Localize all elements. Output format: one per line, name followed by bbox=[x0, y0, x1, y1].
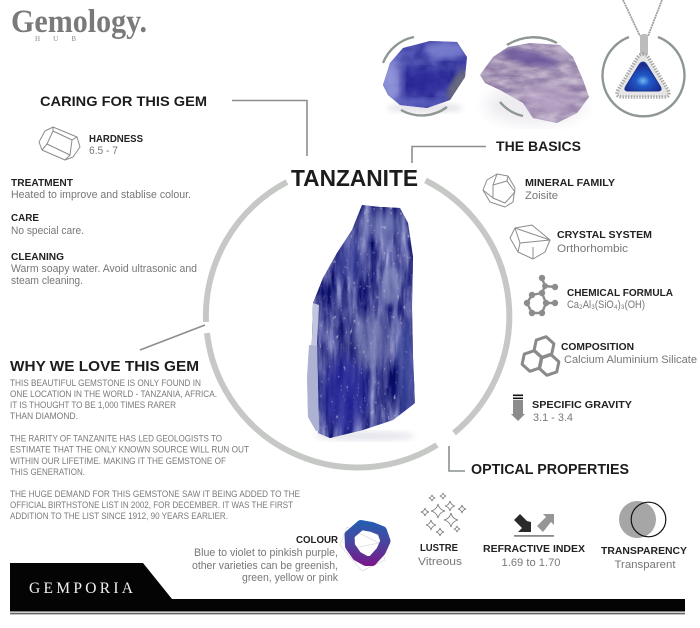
gem photo: tanzanite pendant bbox=[602, 0, 684, 116]
crystal system text: Orthorhombic bbox=[557, 243, 629, 255]
paragraph 2 bbox=[10, 434, 249, 478]
heading: caring for this gem: CARING FOR THIS GEM bbox=[40, 93, 207, 109]
icon: specific gravity arrow bbox=[511, 394, 525, 421]
panel: caring for this gem bbox=[11, 93, 307, 287]
paragraph 2: WITHIN OUR LIFETIME. MAKING IT THE GEMSTONE OF bbox=[10, 456, 226, 467]
paragraph 2: THE RARITY OF TANZANITE HAS LED GEOLOGISTS TO bbox=[10, 434, 222, 444]
specific gravity text: SPECIFIC GRAVITY bbox=[532, 399, 632, 411]
mineral family text bbox=[525, 177, 615, 202]
colour text bbox=[192, 534, 338, 584]
paragraph 1: THAN DIAMOND. bbox=[10, 411, 78, 422]
ring arcs around lilac stone bbox=[500, 37, 557, 116]
icon: hardness crystal bbox=[39, 127, 80, 160]
cleaning text: Warm soapy water. Avoid ultrasonic and bbox=[11, 263, 197, 275]
care text: CARE bbox=[11, 212, 39, 224]
treatment text: TREATMENT bbox=[11, 177, 74, 189]
chemical formula text: Ca₂Al₃(SiO₄)₃(OH) bbox=[567, 299, 645, 311]
mineral family text: MINERAL FAMILY bbox=[525, 177, 615, 189]
footer band: Gemporia bbox=[10, 563, 685, 614]
transparency text: Transparent bbox=[614, 559, 676, 571]
gem photo: blue rough stone bbox=[377, 37, 473, 115]
logo: Gemology Hub: Gemology. bbox=[11, 4, 147, 40]
icon: lustre sparkles bbox=[421, 493, 466, 536]
lustre text: Vitreous bbox=[418, 556, 463, 568]
main gem: rough tanzanite crystal bbox=[307, 205, 415, 442]
hardness text: 6.5 - 7 bbox=[89, 145, 118, 157]
pendant ring bbox=[602, 37, 684, 116]
treatment text: Heated to improve and stablise colour. bbox=[11, 189, 191, 201]
chemical formula text bbox=[567, 287, 673, 311]
logo: Gemology Hub: HUB bbox=[35, 35, 76, 43]
cleaning text bbox=[11, 251, 197, 287]
icon: refractive index arrows bbox=[514, 514, 554, 537]
specific gravity text: 3.1 - 3.4 bbox=[533, 412, 573, 424]
heading: why we love this gem: WHY WE LOVE THIS GEM bbox=[10, 358, 199, 375]
paragraph 2: ESTIMATE THAT THE ONLY KNOWN SOURCE WILL RUN OUT bbox=[10, 444, 249, 456]
colour text: COLOUR bbox=[296, 534, 338, 546]
paragraph 2: THIS GENERATION. bbox=[10, 467, 85, 478]
icon: composition hexagons bbox=[521, 335, 560, 377]
title: Tanzanite: TANZANITE bbox=[291, 165, 418, 191]
icon: chemical formula bbox=[524, 275, 558, 316]
necklace chain bbox=[623, 0, 662, 36]
connector line: caring to title bbox=[232, 100, 307, 156]
care text bbox=[11, 212, 84, 237]
colour text: green, yellow or pink bbox=[242, 572, 338, 584]
refractive index text bbox=[483, 543, 585, 569]
composition text bbox=[561, 341, 697, 366]
hardness text: HARDNESS bbox=[89, 133, 143, 145]
connector line: why to ring bbox=[140, 325, 205, 350]
ring arcs around blue stone bbox=[383, 37, 447, 115]
paragraph 1: ONE LOCATION IN THE WORLD - TANZANIA, AFRICA. bbox=[10, 389, 217, 400]
ring around main gem bbox=[206, 180, 509, 468]
lustre text bbox=[418, 542, 463, 568]
footer brand name: GEMPORIA bbox=[29, 580, 134, 597]
composition text: Calcium Aluminium Silicate bbox=[564, 354, 697, 366]
paragraph 3: THE HUGE DEMAND FOR THIS GEMSTONE SAW IT BEING ADDED TO THE bbox=[10, 489, 300, 500]
transparency text: TRANSPARENCY bbox=[601, 545, 687, 557]
mineral family text: Zoisite bbox=[525, 190, 558, 202]
treatment text bbox=[11, 177, 191, 201]
cleaning text: steam cleaning. bbox=[11, 275, 83, 287]
icon: mineral family bbox=[483, 174, 515, 207]
crystal system text: CRYSTAL SYSTEM bbox=[557, 229, 652, 241]
specific gravity text bbox=[532, 399, 632, 424]
paragraph 3: OFFICIAL BIRTHSTONE LIST IN 2002, FOR DECEMBER. IT WAS THE FIRST bbox=[10, 500, 293, 511]
heading: the basics: THE BASICS bbox=[496, 138, 581, 154]
refractive index text: 1.69 to 1.70 bbox=[502, 557, 560, 569]
cleaning text: CLEANING bbox=[11, 251, 64, 263]
transparency text bbox=[601, 545, 687, 571]
panel: optical properties bbox=[418, 446, 687, 571]
connector line: basics to title bbox=[412, 146, 486, 163]
icon: colour hexagon bbox=[340, 525, 386, 571]
paragraph 3 bbox=[10, 489, 300, 522]
icon: transparency circles bbox=[619, 501, 666, 538]
colour text: other varieties can be greenish, bbox=[192, 560, 338, 572]
crystal system text bbox=[557, 229, 652, 255]
panel: why we love this gem bbox=[10, 325, 300, 522]
gem photo: lilac rough stone bbox=[478, 37, 592, 126]
panel: colour bbox=[192, 525, 386, 584]
lustre text: LUSTRE bbox=[420, 542, 458, 554]
heading: optical properties: OPTICAL PROPERTIES bbox=[471, 462, 629, 478]
composition text: COMPOSITION bbox=[561, 341, 634, 353]
paragraph 1 bbox=[10, 378, 217, 422]
connector line: optical to ring bbox=[449, 446, 465, 471]
paragraph 3: ADDITION TO THE LIST SINCE 1912, 90 YEARS EARLIER. bbox=[10, 511, 228, 522]
icon: crystal system bbox=[510, 225, 550, 259]
pendant stone bbox=[617, 54, 669, 97]
chemical formula text: CHEMICAL FORMULA bbox=[567, 287, 673, 299]
hardness text bbox=[89, 133, 143, 157]
care text: No special care. bbox=[11, 225, 84, 237]
colour text: Blue to violet to pinkish purple, bbox=[194, 547, 338, 559]
refractive index text: REFRACTIVE INDEX bbox=[483, 543, 585, 555]
paragraph 1: THIS BEAUTIFUL GEMSTONE IS ONLY FOUND IN bbox=[10, 378, 201, 389]
paragraph 1: IT IS THOUGHT TO BE 1,000 TIMES RARER bbox=[10, 400, 176, 411]
panel: the basics bbox=[412, 138, 697, 424]
